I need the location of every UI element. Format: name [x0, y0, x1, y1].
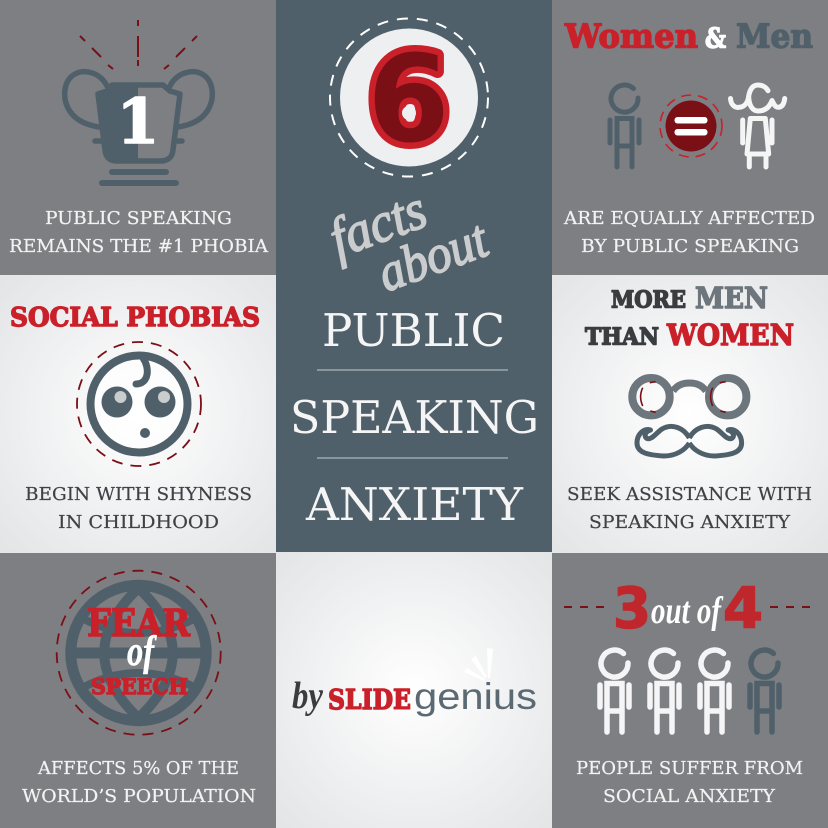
caption: IN CHILDHOOD	[58, 512, 219, 533]
icon: spark rays	[464, 648, 493, 681]
icon label: fear of speech	[87, 601, 190, 699]
logo: SLIDE	[328, 685, 411, 716]
title: public speaking anxiety: SPEAKING	[290, 391, 539, 444]
icon: person one	[600, 650, 629, 732]
heading: out of	[651, 590, 724, 632]
title: public speaking anxiety: ANXIETY	[305, 478, 524, 531]
heading: SOCIAL PHOBIAS	[10, 303, 260, 333]
caption: SOCIAL ANXIETY	[603, 786, 776, 807]
panel: social phobias	[0, 276, 276, 552]
icon: globe	[57, 571, 221, 735]
heading: WOMEN	[666, 318, 794, 352]
heading: Women	[564, 16, 698, 56]
heading: MEN	[695, 281, 768, 315]
icon: person three	[700, 650, 729, 732]
heading: Men	[736, 16, 813, 56]
caption	[576, 758, 803, 807]
logo: genius	[414, 676, 537, 717]
panel: three out of four	[552, 553, 828, 828]
icon: equals sign badge	[660, 95, 722, 157]
script heading: facts about: facts	[321, 178, 435, 270]
icon: woman	[730, 85, 785, 167]
caption: SPEAKING ANXIETY	[589, 512, 791, 533]
icon: person four	[750, 650, 779, 732]
icon: person two	[650, 650, 679, 732]
icon label: fear of speech: of	[127, 629, 157, 675]
number six: 6	[368, 31, 450, 170]
icon: moustache	[637, 426, 742, 456]
caption: REMAINS THE #1 PHOBIA	[9, 236, 269, 257]
caption: SEEK ASSISTANCE WITH	[567, 484, 812, 505]
icon: number six badge	[330, 18, 488, 176]
logo: by	[292, 675, 323, 717]
caption	[25, 484, 252, 533]
heading: 3	[613, 576, 651, 642]
caption	[567, 484, 812, 533]
caption	[563, 208, 815, 257]
caption: ARE EQUALLY AFFECTED	[563, 208, 815, 229]
caption: BY PUBLIC SPEAKING	[581, 236, 799, 257]
panel: slidegenius logo	[276, 552, 552, 828]
trophy number: 1	[116, 85, 160, 158]
heading: 4	[723, 576, 763, 642]
panel: public speaking number one phobia	[0, 0, 276, 275]
title: public speaking anxiety	[290, 304, 539, 531]
icon: trophy with rays	[65, 20, 212, 183]
caption: PUBLIC SPEAKING	[45, 208, 232, 229]
heading: THAN	[585, 324, 659, 350]
panel: women and men equally affected	[552, 0, 828, 275]
caption: BEGIN WITH SHYNESS	[25, 484, 252, 505]
panel: more men than women	[552, 276, 828, 552]
caption	[9, 208, 269, 257]
title: public speaking anxiety: PUBLIC	[322, 304, 505, 357]
caption: AFFECTS 5% OF THE	[37, 758, 239, 779]
icon: man	[610, 85, 639, 167]
icon label: fear of speech: FEAR	[87, 601, 190, 645]
panel: fear of speech	[0, 553, 276, 828]
caption: PEOPLE SUFFER FROM	[576, 758, 803, 779]
panel: center title column	[276, 0, 552, 552]
heading	[564, 576, 816, 642]
icon label: fear of speech: SPEECH	[91, 674, 188, 699]
icon: glasses	[632, 378, 746, 415]
script heading: facts about: about	[370, 208, 497, 303]
heading	[564, 16, 813, 56]
heading: MORE	[611, 286, 686, 314]
icon: baby face	[77, 342, 201, 466]
logo	[292, 648, 537, 717]
caption: WORLD’S POPULATION	[22, 786, 256, 807]
heading	[585, 281, 794, 352]
heading: &	[705, 24, 726, 54]
caption	[22, 758, 256, 807]
script heading: facts about	[321, 178, 497, 303]
